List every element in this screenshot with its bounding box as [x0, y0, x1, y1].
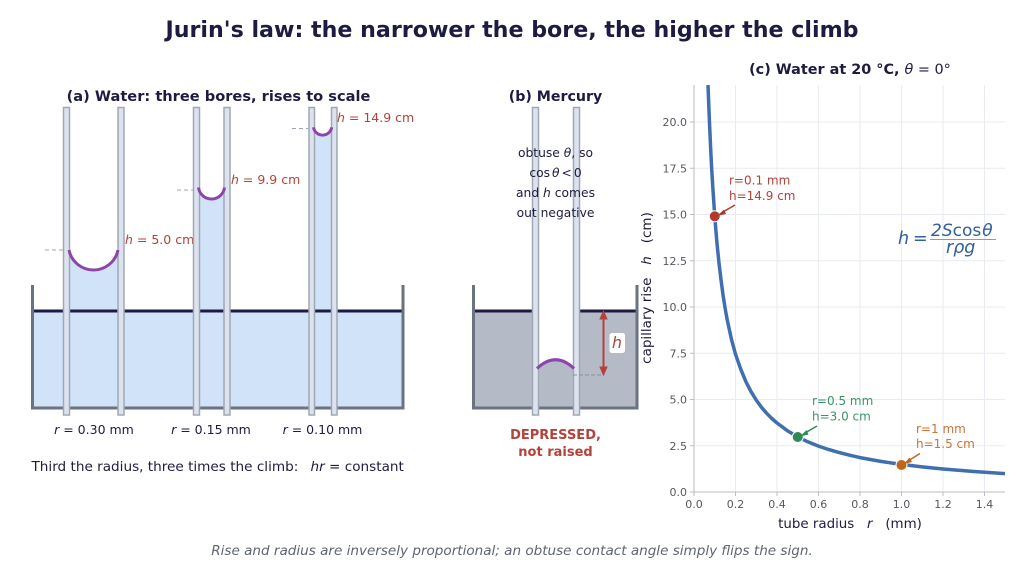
x tick labels: 0.6: [810, 498, 827, 511]
title: Jurin's law: the narrower the bore, the higher the climb: [163, 17, 859, 43]
point: r = 0.5 mm: [792, 394, 873, 442]
heading: panel c: (c) Water at 20 °C, θ = 0°: [749, 62, 951, 78]
tube 1: r = 0.30 mm: h = 5.0 cm: [125, 232, 194, 247]
x tick labels: 1.4: [976, 498, 993, 511]
y tick labels: 20.0: [662, 116, 687, 129]
x axis label: tube radius r (mm): [778, 517, 922, 532]
formula: h: [898, 229, 909, 249]
explanation text: and h comes: [516, 186, 595, 200]
explanation text: [516, 146, 595, 220]
x tick labels: [685, 498, 993, 511]
radius labels: r = 0.15 mm: [171, 422, 251, 437]
point: r = 0.5 mm: h=3.0 cm: [812, 410, 871, 424]
y tick labels: 5.0: [670, 394, 687, 406]
panel: mercury: [473, 89, 637, 460]
radius labels: r = 0.30 mm: [54, 422, 134, 437]
y tick labels: 10.0: [662, 301, 687, 314]
y axis label: capillary rise h (cm): [639, 212, 655, 364]
mercury reservoir: [473, 285, 637, 408]
depressed label: not raised: [518, 445, 593, 460]
point: r = 1 mm: [896, 422, 975, 470]
arrow: depression h: h: [612, 333, 622, 352]
tube 2: r = 0.15 mm: h = 9.9 cm: [231, 172, 300, 187]
heading: panel a: (a) Water: three bores, rises to scale: [67, 88, 370, 105]
tube 3: r = 0.10 mm: [292, 108, 414, 415]
tube 1: r = 0.30 mm: [45, 108, 194, 415]
heading: panel b: (b) Mercury: [509, 89, 602, 105]
radius labels: [54, 422, 362, 437]
takeaway text: = constant: [329, 459, 404, 475]
convex meniscus: [537, 360, 574, 368]
tube 2: r = 0.15 mm: [177, 108, 300, 415]
x tick labels: 0.0: [685, 498, 703, 511]
formula: =: [913, 229, 928, 249]
takeaway text: Third the radius, three times the climb:: [32, 459, 298, 475]
grid lines: [694, 85, 1005, 492]
formula: rρg: [946, 238, 975, 258]
curve h vs r: [708, 85, 1005, 474]
y tick labels: 7.5: [670, 348, 687, 360]
y tick labels: 12.5: [662, 255, 687, 268]
x tick labels: 1.2: [934, 498, 952, 511]
point: r = 0.1 mm: [709, 174, 795, 222]
y tick labels: 2.5: [670, 440, 687, 453]
y tick labels: 15.0: [662, 208, 687, 222]
x tick labels: 0.2: [727, 498, 744, 511]
panel: chart water at 20 C: [639, 62, 1005, 532]
tube 3: r = 0.10 mm: h = 14.9 cm: [337, 110, 414, 125]
y tick labels: 17.5: [662, 162, 687, 176]
radius labels: r = 0.10 mm: [283, 422, 362, 437]
axes: [690, 85, 1005, 496]
depressed label: DEPRESSED,: [510, 428, 601, 443]
x tick labels: 0.4: [768, 498, 786, 511]
y tick labels: [662, 116, 687, 499]
point: r = 0.1 mm: h=14.9 cm: [729, 189, 795, 203]
explanation text: obtuse θ, so: [518, 146, 593, 160]
panel: water three bores: [30, 88, 414, 475]
x tick labels: 1.0: [893, 498, 910, 511]
depressed label: [510, 428, 601, 460]
point: r = 0.5 mm: r=0.5 mm: [812, 394, 873, 408]
arrow: depression h: [600, 311, 625, 375]
explanation text: out negative: [517, 206, 594, 220]
point: r = 1 mm: r=1 mm: [916, 422, 966, 436]
y tick labels: 0.0: [670, 486, 687, 499]
x tick labels: 0.8: [851, 498, 869, 511]
footer caption: Rise and radius are inversely proportional; an obtuse contact angle simply flips the sign.: [211, 543, 813, 559]
takeaway text: hr: [310, 459, 326, 475]
formula: 2Scosθ: [931, 221, 993, 241]
explanation text: cosθ<0: [529, 166, 582, 180]
mercury tubes: [532, 108, 580, 415]
water reservoir: [32, 127, 403, 408]
point: r = 1 mm: h=1.5 cm: [916, 437, 975, 451]
formula: [898, 221, 996, 258]
point: r = 0.1 mm: r=0.1 mm: [729, 174, 790, 188]
